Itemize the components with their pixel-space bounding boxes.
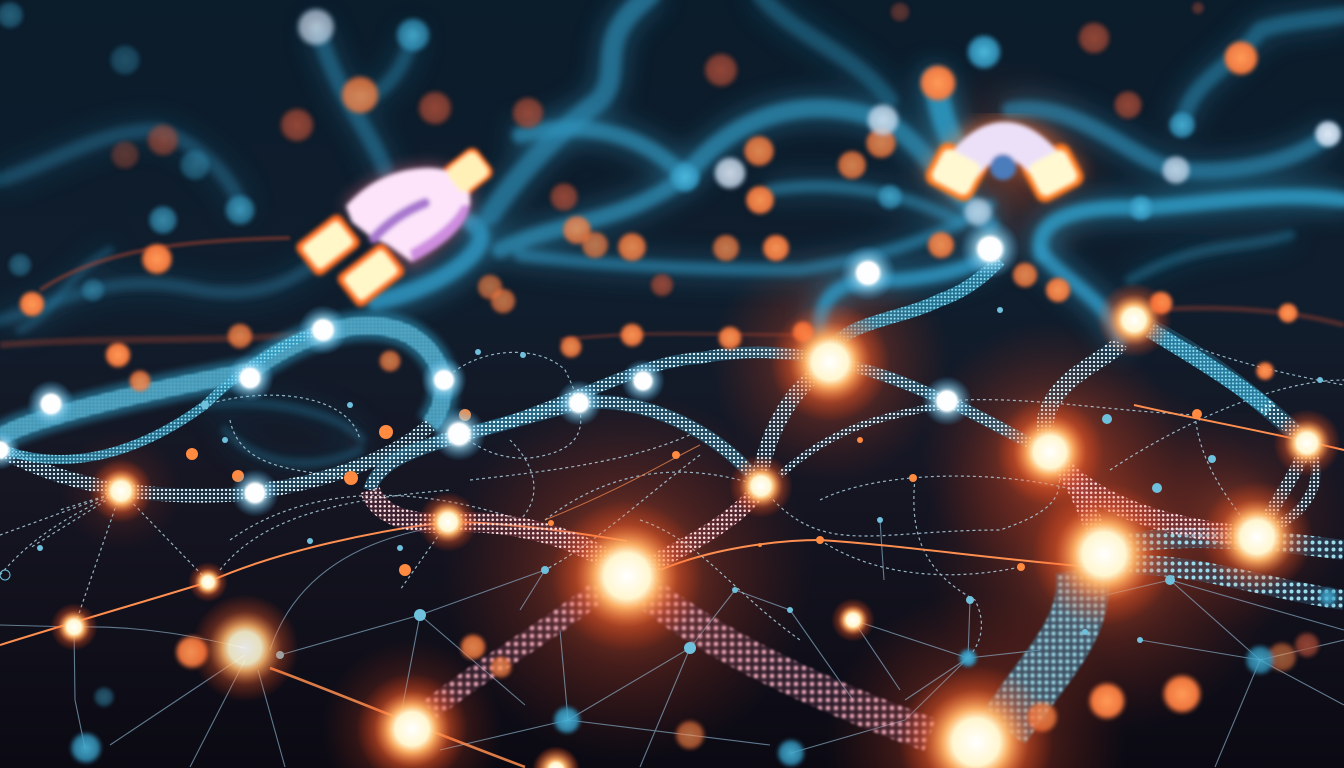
- magnet right lower bokeh: [962, 196, 994, 228]
- magnet right glow: [940, 140, 1068, 185]
- magnet right inner notch: [990, 154, 1016, 180]
- thin network lines: [0, 320, 1344, 767]
- blurred foreground ribbons: [430, 570, 1083, 735]
- dotted ribbons right: [830, 260, 1344, 600]
- small network dots: [0, 307, 1323, 659]
- orange energy lines: [0, 405, 1344, 767]
- bright white nodes: [0, 219, 1020, 517]
- magnet right tip left: [929, 146, 983, 198]
- ribbon left loop inner strand: [5, 330, 323, 460]
- magnet left tips glow: [294, 145, 496, 309]
- ribbon left loop upper teal strand: [0, 326, 443, 438]
- magnet right: [922, 139, 1087, 228]
- faint red lines upper left: [0, 238, 1344, 345]
- magnet left: [294, 145, 496, 309]
- blurred blue tubes upper field: [0, 0, 1344, 463]
- magnet left shaded side: [410, 205, 470, 262]
- magnet right body: [962, 140, 1048, 168]
- magnet left rear tip: [445, 149, 491, 195]
- ribbon left loop glow: [0, 326, 443, 438]
- wide soft blue glow behind tubes: [0, 0, 1344, 463]
- hot orange nodes: [50, 282, 1341, 768]
- magnet left tip lower: [342, 248, 400, 302]
- ribbon left doubling strand: [267, 434, 459, 487]
- magnet right tip right: [1026, 147, 1080, 199]
- magnet left tip upper: [301, 219, 355, 271]
- magnet right tips glow: [922, 139, 1087, 206]
- magnet left slot: [374, 203, 425, 238]
- dotted ribbons centre: [370, 352, 1050, 576]
- ribbon left loop lower dotted strand: [0, 425, 430, 496]
- magnet left glow: [343, 165, 472, 270]
- ribbon left loop: [0, 326, 459, 496]
- magnet left body: [346, 168, 470, 262]
